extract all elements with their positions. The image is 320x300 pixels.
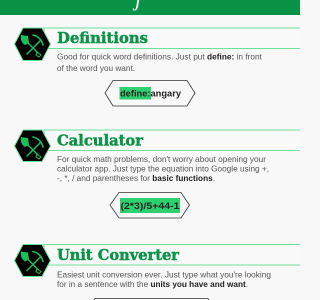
heading band: Definitions [44, 28, 302, 48]
section: Calculator [14, 130, 302, 218]
example box: define:angary: define:angary [120, 88, 182, 98]
body text: Unit Converter: for in a sentence with the units you have and want. [57, 279, 249, 289]
section: Unit Converter [14, 244, 302, 300]
body text: Calculator: calculator app. Just type the equation into Google using +, [57, 164, 269, 174]
heading band: Unit Converter: Unit Converter [57, 247, 179, 264]
heading band: Unit Converter [44, 244, 302, 265]
body text: Unit Converter: Easiest unit conversion ever. Just type what you're looking [57, 270, 271, 280]
example box: calculator equation: (2*3)/5+44-1 [120, 201, 180, 211]
body text: Definitions: of the word you want. [57, 63, 135, 73]
icon: crossed shovel and pick hexagon [14, 130, 50, 162]
icon: crossed shovel and pick hexagon [14, 28, 50, 60]
heading band: Definitions: Definitions [57, 30, 148, 47]
body text: Calculator: -, *, / and parentheses for basic functions. [57, 173, 215, 183]
heading band: Calculator [44, 130, 302, 150]
icon: crossed shovel and pick hexagon [14, 244, 50, 276]
example box: define:angary [105, 80, 195, 106]
example box: unit converter (cropped) [92, 298, 211, 300]
example box: calculator equation [110, 192, 190, 218]
body text: Calculator: For quick math problems, don't worry about opening your [57, 154, 266, 164]
heading band: Calculator: Calculator [57, 132, 143, 150]
top banner [0, 0, 300, 15]
body text: Definitions: Good for quick word definitions. Just put define: in front [57, 52, 263, 62]
section: Definitions [14, 28, 302, 106]
